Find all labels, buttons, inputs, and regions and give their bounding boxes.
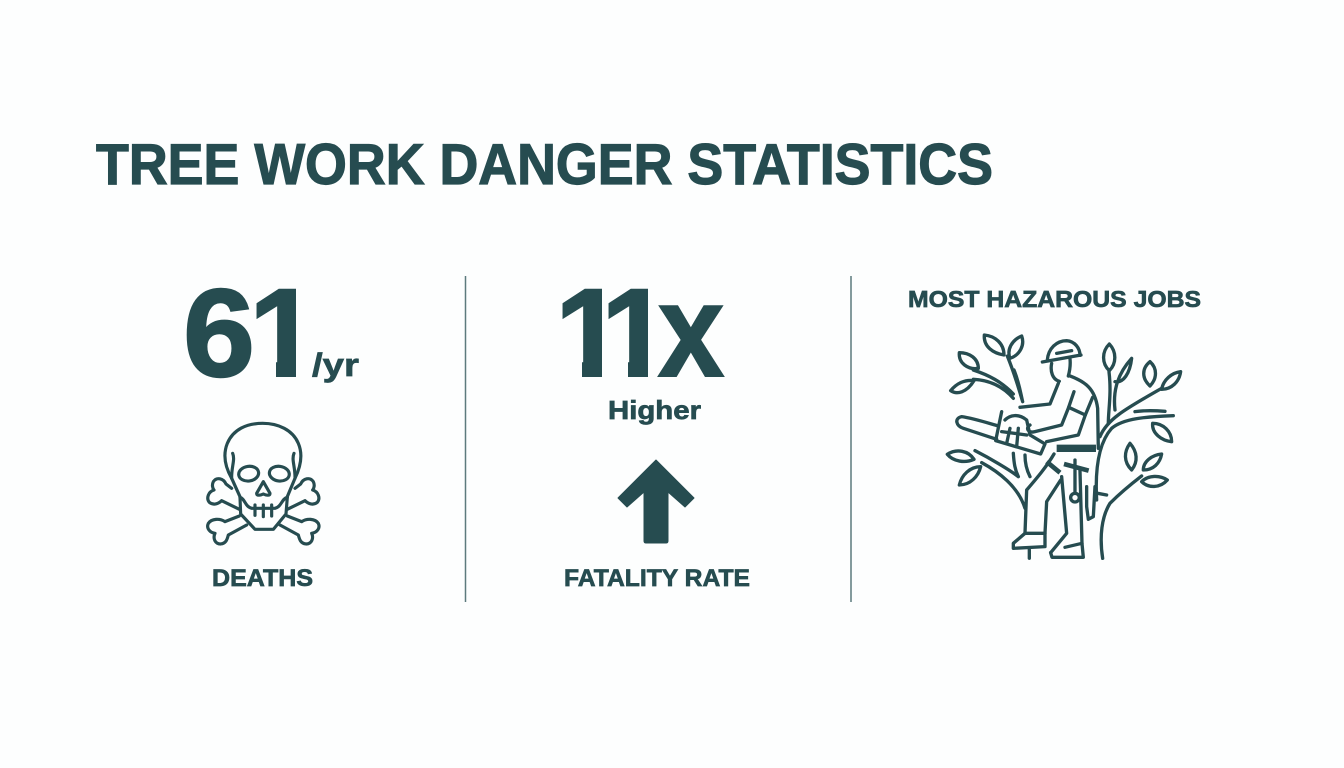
arms and hands [1028,407,1085,442]
higher label: Higher [608,395,701,425]
fatality rate label: FATALITY RATE [564,565,750,592]
right trunk and branches [1101,476,1142,558]
icon: skull and crossbones [208,423,319,544]
panel: fatality rate [551,257,750,592]
title: TREE WORK DANGER STATISTICS [96,133,993,197]
hazardous jobs heading: MOST HAZAROUS JOBS [908,286,1201,312]
multiplier number: 1 [601,264,671,403]
per year unit: /yr [312,347,359,383]
multiplier number: 1 [555,264,625,403]
left lower branches and leaves [975,451,1030,477]
icon: up arrow [618,460,694,543]
left upper branches and leaves [973,356,1023,402]
deaths number: 1 [249,264,319,403]
harness [1057,437,1096,459]
deaths number: 6 [183,264,255,403]
panel: deaths [183,264,359,592]
multiplier number [551,257,724,404]
deaths number [183,264,319,403]
helmet [1042,341,1081,362]
chainsaw [957,417,998,439]
icon: arborist with chainsaw in tree [947,335,1181,558]
legs and boots [1025,454,1061,533]
multiplier number: x [658,257,724,404]
panel: hazardous jobs [908,286,1201,558]
deaths label: DEATHS [212,565,313,592]
head and torso [1051,359,1098,448]
